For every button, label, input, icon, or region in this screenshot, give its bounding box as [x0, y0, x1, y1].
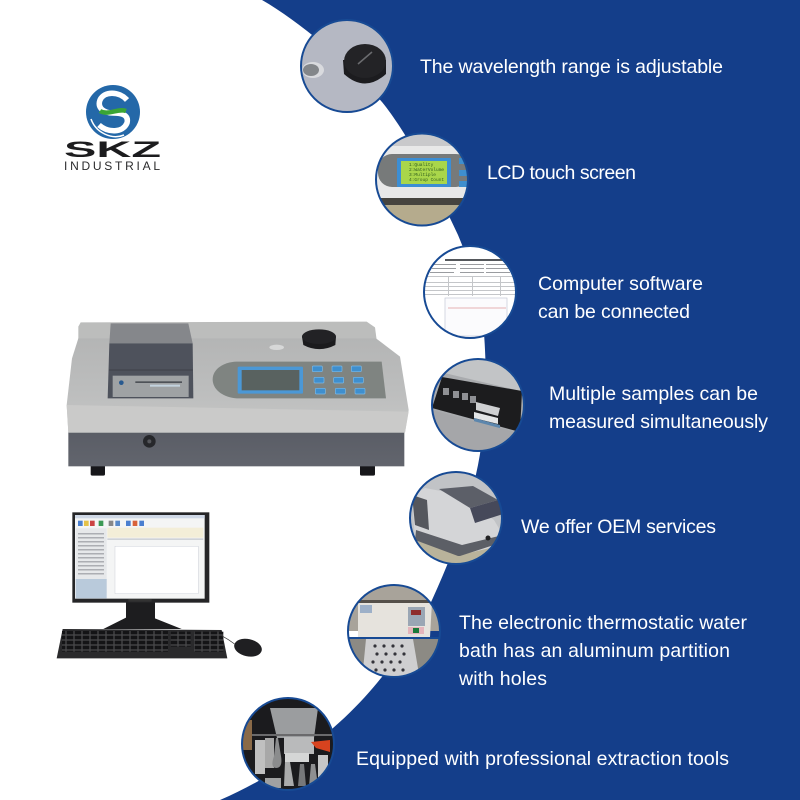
- main instrument: spectrophotometer: [67, 322, 409, 476]
- caption: Multiple samples can be: [549, 383, 758, 405]
- photo: LCD screen: 3:Multiple: [409, 172, 436, 178]
- photo: tool case: [242, 698, 334, 790]
- control panel: [213, 362, 386, 398]
- photo: LCD screen: 2:WaterVolume: [409, 167, 444, 173]
- feature: extraction tools: [242, 698, 729, 790]
- keyboard: [57, 629, 227, 658]
- instrument base and feet: [68, 432, 404, 476]
- logo wordmark: INDUSTRIAL: [64, 159, 160, 173]
- logo wordmark: SKZ: [64, 137, 161, 162]
- logo wordmark: [64, 137, 161, 173]
- printer compartment: [108, 323, 193, 398]
- blue curved background panel: [220, 0, 800, 800]
- feature: wavelength adjustable: [300, 19, 723, 113]
- feature: LCD touch screen: [376, 133, 636, 227]
- photo: software report: [423, 245, 518, 339]
- caption: Equipped with professional extraction tools: [356, 748, 729, 770]
- feature: OEM services: [409, 471, 716, 565]
- photo: LCD screen: 4:Group Count: [409, 177, 444, 183]
- caption: [458, 612, 748, 690]
- caption: bath has an aluminum partition: [459, 640, 730, 662]
- photo: LCD screen: [376, 133, 470, 227]
- monitor: [72, 512, 209, 603]
- caption: We offer OEM services: [521, 516, 716, 538]
- photo: water bath: [347, 584, 441, 680]
- monitor stand: [103, 602, 182, 629]
- photo: sample compartment: [431, 358, 525, 452]
- photo: LCD screen: 1:Quality: [409, 162, 434, 168]
- caption: can be connected: [538, 301, 690, 323]
- wavelength knob: [269, 329, 336, 350]
- caption: with holes: [458, 668, 547, 690]
- mouse: [222, 636, 263, 659]
- caption: The wavelength range is adjustable: [420, 56, 723, 78]
- computer with software, keyboard and mouse: [57, 512, 263, 659]
- caption: The electronic thermostatic water: [459, 612, 748, 634]
- logo emblem: [86, 85, 140, 139]
- instrument body: [67, 322, 409, 433]
- caption: [549, 383, 768, 433]
- feature: multiple samples: [431, 358, 768, 452]
- feature: computer software: [423, 245, 703, 339]
- SKZ Industrial logo: [64, 85, 161, 173]
- caption: [538, 273, 703, 323]
- photo: wavelength knob: [300, 19, 394, 113]
- photo: instrument side view: [409, 471, 503, 565]
- caption: measured simultaneously: [549, 411, 768, 433]
- feature: thermostatic water bath: [347, 584, 748, 690]
- caption: Computer software: [538, 273, 703, 295]
- caption: LCD touch screen: [487, 162, 636, 184]
